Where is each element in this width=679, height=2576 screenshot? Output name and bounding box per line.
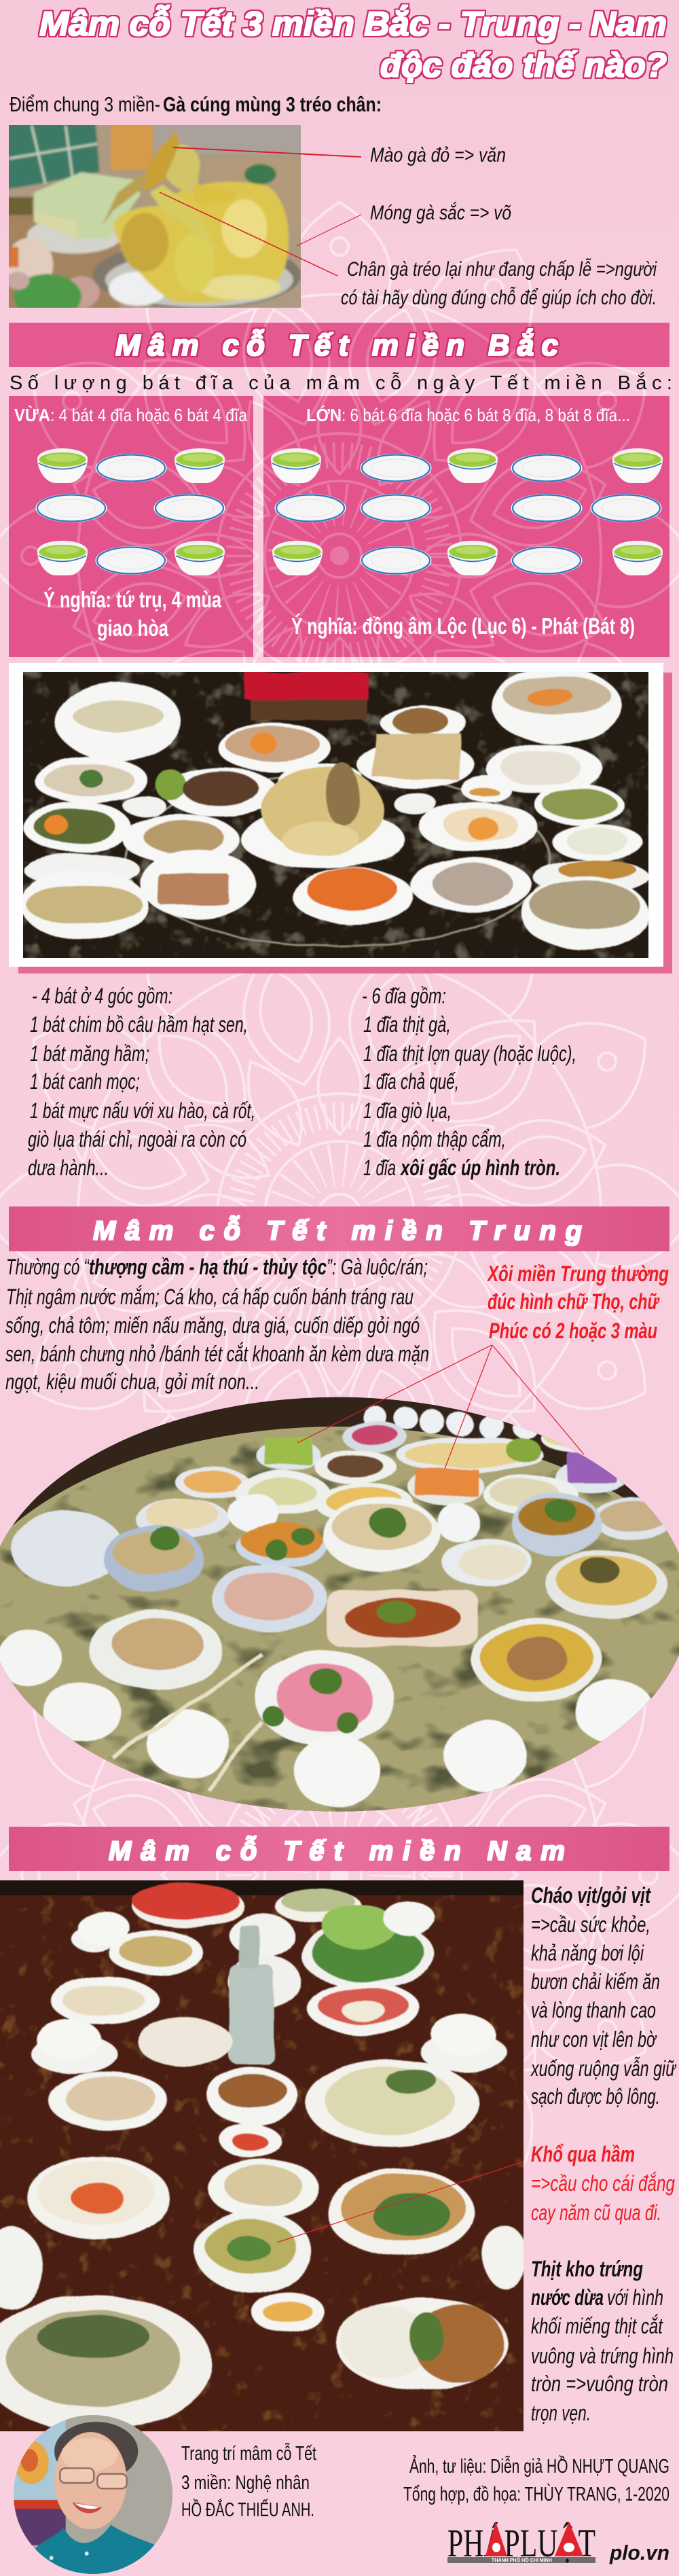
north dish list: plates: 1 đĩa chả quế,: [363, 1069, 459, 1094]
north dish list: plates: 1 đĩa giò lụa,: [363, 1098, 452, 1123]
band: north background: [9, 323, 669, 367]
north dish list: plates: xôi gấc úp hình tròn.: [400, 1156, 560, 1180]
title: [39, 5, 667, 84]
north dish list: plates: 1 đĩa: [363, 1156, 396, 1180]
band: south heading: [9, 1827, 669, 1871]
central intro text: Thường có “: [6, 1255, 90, 1279]
chicken callout labels: Mào gà đỏ => văn: [370, 144, 506, 166]
south note: bitter melon: [531, 2142, 675, 2225]
photo: boiled chicken: [9, 125, 301, 308]
artisan credit: [181, 2442, 316, 2521]
central intro text: sống, chả tôm; miến nấu măng, dưa giá, cuốn diếp gỏi ngó: [5, 1313, 420, 1338]
photo and graphics credit: [403, 2454, 669, 2505]
central intro text: ”: Gà luộc/rán;: [327, 1255, 428, 1279]
logo: plo.vn: plo.vn: [609, 2541, 669, 2564]
chicken callout labels: Móng gà sắc => võ: [370, 202, 511, 224]
logo: Pháp Luật: PHÁPLUẬT: [447, 2521, 595, 2565]
photo: south feast: [0, 1880, 526, 2431]
logo: Pháp Luật: THÀNH PHỐ HỒ CHÍ MINH: [492, 2556, 552, 2563]
band: central heading: [9, 1206, 669, 1251]
panel: medium tray background: [9, 396, 253, 657]
decorative mandala background: [0, 202, 679, 2228]
north dish list: bowls: 1 bát măng hầm;: [30, 1041, 149, 1066]
intro heading: common point of 3 regions: Điểm chung 3 miền-: [10, 92, 160, 116]
photo frame: [9, 663, 663, 967]
intro heading: common point of 3 regions: [10, 92, 382, 116]
central red callout: [486, 1262, 669, 1343]
medium tray content: VỪA: [14, 405, 50, 425]
north dish list: plates: [362, 984, 576, 1180]
medium tray content: Ý nghĩa: tứ trụ, 4 mùa: [43, 587, 221, 612]
north dish list: bowls: 1 bát mực nấu với xu hào, cà rốt,: [30, 1098, 255, 1123]
north dish list: bowls: dưa hành...: [28, 1156, 109, 1180]
large tray content: LỚN: [306, 405, 342, 425]
photo: north feast: [20, 668, 650, 958]
south note: duck: [530, 1883, 677, 2109]
artisan credit: HỒ ĐẮC THIẾU ANH.: [181, 2498, 314, 2521]
north dish list: bowls: 1 bát canh mọc;: [30, 1069, 140, 1094]
central intro text: ngọt, kiệu muối chua, gỏi mít non...: [5, 1370, 259, 1394]
large tray content: [271, 405, 663, 639]
north dish list: plates: 1 đĩa nộm thập cẩm,: [363, 1127, 506, 1151]
south callout line: [277, 2162, 524, 2242]
north dish list: plates: - 6 đĩa gồm:: [362, 984, 446, 1008]
band: central heading: Mâm cỗ Tết miền Trung: [93, 1215, 582, 1246]
north dish count heading: Số lượng bát đĩa của mâm cỗ ngày Tết miền Bắc:: [10, 372, 672, 394]
central callout lines: [297, 1345, 584, 1469]
south note: braised pork: trọn vẹn.: [531, 2401, 591, 2425]
medium tray content: [14, 405, 247, 641]
south note: braised pork: [531, 2257, 674, 2425]
chicken callout labels: [341, 144, 657, 309]
artisan credit: 3 miền: Nghệ nhân: [181, 2472, 310, 2494]
central intro text: [5, 1255, 429, 1394]
central intro text: Thịt ngâm nước mắm; Cá kho, cá hấp cuốn bánh tráng rau: [6, 1285, 414, 1309]
artisan credit: Trang trí mâm cỗ Tết: [181, 2442, 316, 2465]
large tray content: : 6 bát 6 đĩa hoặc 6 bát 8 đĩa, 8 bát 8 đĩa...: [342, 405, 630, 425]
panel: large tray background: [263, 396, 669, 657]
north dish list: bowls: 1 bát chim bồ câu hầm hạt sen,: [30, 1012, 248, 1037]
title: Mâm cỗ Tết 3 miền Bắc - Trung - Nam: [39, 5, 667, 43]
medium tray content: giao hòa: [97, 615, 168, 641]
south note: braised pork: Thịt kho trứng: [531, 2257, 643, 2281]
north heading: Mâm cỗ Tết miền Bắc: [115, 327, 558, 362]
north dish list: plates: 1 đĩa thịt gà,: [363, 1012, 451, 1037]
portrait: artisan: [12, 2414, 177, 2576]
north dish list: bowls: giò lụa thái chỉ, ngoài ra còn có: [28, 1127, 246, 1151]
south note: bitter melon: Khổ qua hầm: [531, 2142, 635, 2166]
medium tray content: : 4 bát 4 đĩa hoặc 6 bát 4 đĩa: [50, 405, 247, 425]
intro heading: common point of 3 regions: Gà cúng mùng 3 tréo chân:: [163, 92, 382, 116]
north dish list: plates: 1 đĩa thịt lợn quay (hoặc luộc),: [363, 1041, 576, 1066]
band: south heading: Mâm cỗ Tết miền Nam: [109, 1835, 565, 1866]
photo: central feast: [0, 1397, 679, 1812]
callout lines on chicken: [160, 147, 361, 276]
north dish list: bowls: - 4 bát ở 4 góc gồm:: [32, 984, 172, 1008]
central intro text: thượng cầm - hạ thú - thủy tộc: [89, 1255, 327, 1279]
north dish list: bowls: [28, 984, 255, 1180]
central intro text: sen, bánh chưng nhỏ /bánh tét cắt khoanh ăn kèm dưa mặn: [5, 1342, 429, 1366]
photo frame shadow: [18, 673, 672, 973]
title: độc đáo thế nào?: [380, 46, 667, 84]
south note: braised pork: nước dừa: [531, 2285, 604, 2310]
